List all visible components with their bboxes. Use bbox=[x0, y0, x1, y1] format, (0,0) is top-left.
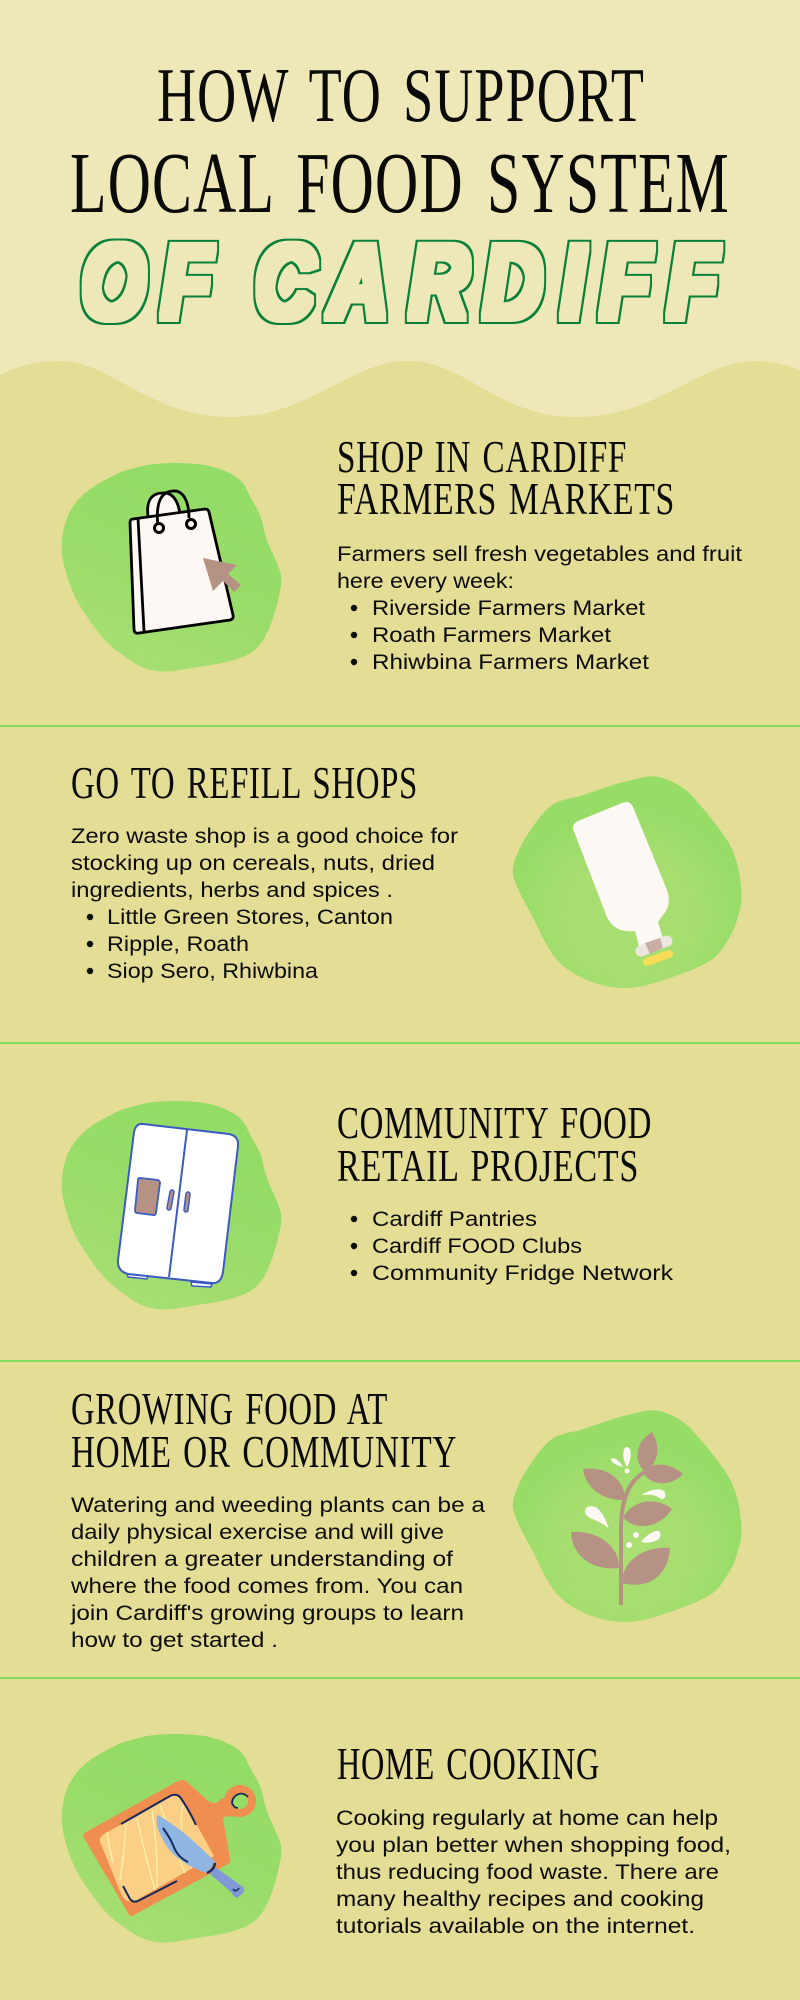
heading: GO TO REFILL SHOPS bbox=[71, 757, 418, 808]
body text bbox=[336, 1807, 731, 1938]
body text: Zero waste shop is a good choice for bbox=[71, 825, 458, 848]
heading: COMMUNITY FOOD bbox=[337, 1097, 652, 1148]
body text: Rhiwbina Farmers Market bbox=[372, 651, 649, 674]
panel: refill shops bbox=[0, 727, 800, 1042]
panel: farmers markets bbox=[0, 430, 800, 726]
bullet list: Cardiff FOOD Clubs bbox=[372, 1235, 582, 1258]
body text: Cooking regularly at home can help bbox=[336, 1807, 718, 1830]
title bbox=[70, 52, 730, 340]
icon: shopping bag on green blob bbox=[62, 463, 281, 672]
body text: Riverside Farmers Market bbox=[372, 597, 645, 620]
body text: you plan better when shopping food, bbox=[336, 1834, 731, 1857]
body text: where the food comes from. You can bbox=[70, 1575, 463, 1598]
icon: fridge on green blob bbox=[62, 1101, 281, 1310]
heading bbox=[337, 1097, 652, 1191]
panel: home cooking bbox=[0, 1679, 800, 2000]
heading: SHOP IN CARDIFF bbox=[337, 431, 627, 482]
icon: bottle on green blob bbox=[513, 776, 742, 988]
panel: community food bbox=[0, 1044, 800, 1360]
title line 3: outlined: OF CARDIFF bbox=[82, 223, 720, 340]
body text: here every week: bbox=[337, 570, 514, 593]
body text bbox=[71, 825, 458, 983]
bullet list: Cardiff Pantries bbox=[372, 1208, 537, 1231]
heading: HOME OR COMMUNITY bbox=[71, 1426, 457, 1477]
body text: ingredients, herbs and spices . bbox=[71, 879, 393, 902]
body text: stocking up on cereals, nuts, dried bbox=[71, 852, 435, 875]
body text: children a greater understanding of bbox=[71, 1548, 453, 1571]
body text bbox=[337, 543, 742, 674]
body text: thus reducing food waste. There are bbox=[336, 1861, 719, 1884]
icon: cursor arrow bbox=[203, 558, 241, 592]
bullet list: Community Fridge Network bbox=[372, 1262, 674, 1285]
body text: how to get started . bbox=[71, 1629, 278, 1652]
heading: GROWING FOOD AT bbox=[71, 1383, 388, 1434]
body text: daily physical exercise and will give bbox=[71, 1521, 444, 1544]
heading bbox=[71, 1383, 457, 1477]
icon: chopping board and knife on green blob bbox=[62, 1734, 281, 1942]
body text: Farmers sell fresh vegetables and fruit bbox=[337, 543, 742, 566]
panel: growing food bbox=[0, 1362, 800, 1677]
bullet list bbox=[351, 1208, 674, 1285]
body text: Siop Sero, Rhiwbina bbox=[107, 960, 318, 983]
body text: join Cardiff's growing groups to learn bbox=[70, 1602, 464, 1625]
body text: Roath Farmers Market bbox=[372, 624, 611, 647]
body text: Ripple, Roath bbox=[107, 933, 249, 956]
icon: plant on green blob bbox=[513, 1410, 742, 1622]
body text: tutorials available on the internet. bbox=[336, 1915, 695, 1938]
body text: many healthy recipes and cooking bbox=[336, 1888, 704, 1911]
heading bbox=[337, 431, 675, 524]
body text: Watering and weeding plants can be a bbox=[71, 1494, 485, 1517]
heading: FARMERS MARKETS bbox=[337, 473, 675, 524]
heading: RETAIL PROJECTS bbox=[337, 1140, 639, 1191]
body text: Little Green Stores, Canton bbox=[107, 906, 393, 929]
body text bbox=[70, 1494, 485, 1652]
heading: HOME COOKING bbox=[337, 1738, 600, 1789]
